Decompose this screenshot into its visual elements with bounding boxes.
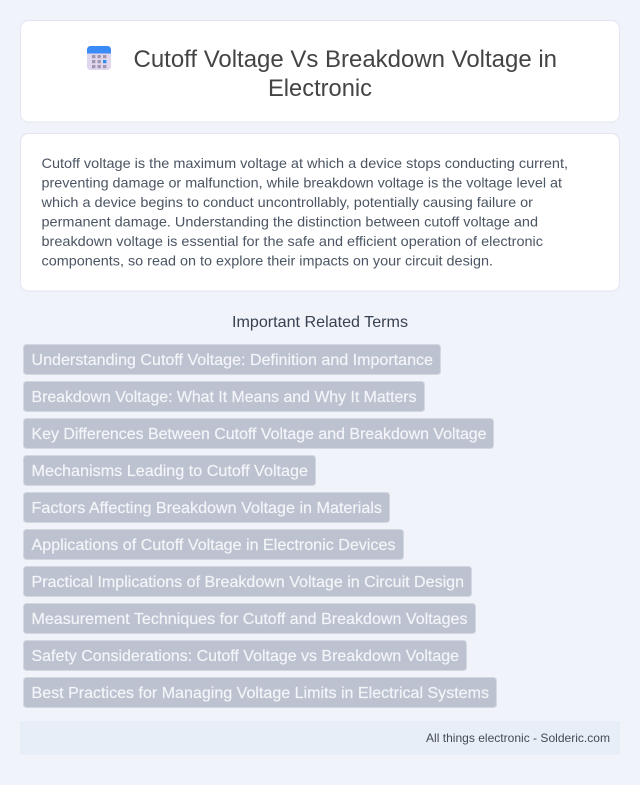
description text: which a device begins to conduct uncontrollably, potentially causing failure or [40,194,533,210]
term 2 [24,382,424,412]
term 3 [24,418,494,448]
term 5: Factors Affecting Breakdown Voltage in Materials [32,500,382,517]
description text: Cutoff voltage is the maximum voltage at which a device stops conducting current, [42,155,568,171]
term 4: Mechanisms Leading to Cutoff Voltage [32,463,308,480]
term 1: Understanding Cutoff Voltage: Definition and Importance [32,352,433,369]
footer: All things electronic - Solderic.com [426,731,610,745]
footer [20,721,620,755]
heading: important related terms: Important Related Terms [232,314,408,331]
term 1 [24,344,440,374]
term 9 [24,640,466,670]
header panel [20,20,620,122]
term 6: Applications of Cutoff Voltage in Electronic Devices [32,537,396,554]
term 4 [24,456,316,486]
description text: permanent damage. Understanding the distinction between cutoff voltage and [42,214,538,230]
term 2: Breakdown Voltage: What It Means and Why It Matters [32,389,416,406]
term 10 [24,678,496,708]
term 8: Measurement Techniques for Cutoff and Breakdown Voltages [32,611,468,628]
list of related terms [24,344,496,708]
title: Electronic [268,75,372,102]
description text [40,155,568,268]
panel: description [20,134,620,291]
description text: breakdown voltage is essential for the safe and efficient operation of electronic [42,233,543,249]
description text: preventing damage or malfunction, while breakdown voltage is the voltage level at [42,174,562,190]
term 7: Practical Implications of Breakdown Voltage in Circuit Design [32,574,464,591]
term 5 [24,492,390,522]
term 7 [24,566,472,596]
term 8 [24,604,476,634]
term 9: Safety Considerations: Cutoff Voltage vs Breakdown Voltage [32,648,459,665]
icon: calendar [87,46,111,70]
term 3: Key Differences Between Cutoff Voltage and Breakdown Voltage [32,426,487,443]
description text: components, so read on to explore their impacts on your circuit design. [42,252,493,268]
term 10: Best Practices for Managing Voltage Limits in Electrical Systems [32,685,489,702]
title: Cutoff Voltage Vs Breakdown Voltage in [134,46,557,73]
title [134,46,557,102]
term 6 [24,530,404,560]
